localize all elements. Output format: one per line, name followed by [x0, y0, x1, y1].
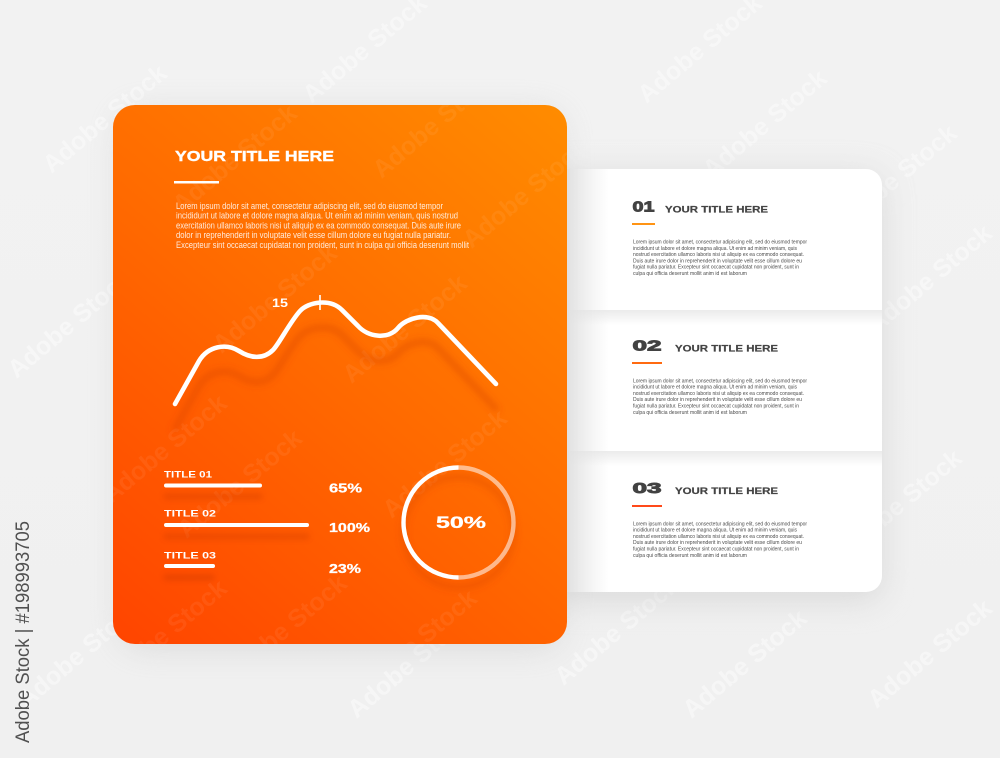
watermark on orange card: Adobe Stock: [367, 64, 502, 184]
watermark on orange card: Adobe Stock: [167, 99, 302, 219]
section 02 title: YOUR TITLE HERE: [675, 344, 778, 354]
watermark pattern on background: Adobe Stock: [549, 571, 684, 691]
section 03 body text: nostrud exercitation ullamco laboris nisi ut aliquip ex ea commodo consequat.: [633, 534, 804, 540]
heading underline: [174, 181, 219, 184]
section 02: [632, 338, 807, 416]
watermark pattern on background: Adobe Stock: [827, 119, 962, 239]
watermark pattern on background: Adobe Stock: [832, 444, 967, 564]
watermark on orange card: Adobe Stock: [377, 404, 512, 524]
donut value: 50%: [436, 514, 486, 532]
bar: title 02: [164, 508, 371, 539]
watermark on orange card: Adobe Stock: [207, 239, 342, 359]
section 01 body text: culpa qui officia deserunt mollit anim id est laborum: [633, 271, 748, 277]
watermark on orange card: Adobe Stock: [97, 574, 232, 694]
watermark on orange card: Adobe Stock: [217, 569, 352, 689]
chart value label: 15: [272, 296, 288, 310]
section 01 title: YOUR TITLE HERE: [665, 204, 768, 214]
section 02 body text: Duis aute irure dolor in reprehenderit in voluptate velit esse cillum dolore eu: [633, 397, 802, 403]
bar: title 03: 23%: [329, 561, 362, 576]
section 01 body text: nostrud exercitation ullamco laboris nisi ut aliquip ex ea commodo consequat.: [633, 252, 804, 258]
watermark on orange card: Adobe Stock: [347, 584, 482, 704]
section 03 title: YOUR TITLE HERE: [675, 486, 778, 496]
watermark on orange card: Adobe Stock: [457, 134, 592, 254]
watermark pattern on background: Adobe Stock: [862, 219, 997, 339]
section 02 number: 02: [632, 338, 662, 354]
section 01 body text: fugiat nulla pariatur. Excepteur sint occaecat cupidatat non proident, sunt in: [633, 265, 799, 271]
intro text: [176, 201, 469, 250]
section 03: [632, 480, 807, 559]
intro text: Lorem ipsum dolor sit amet, consectetur adipiscing elit, sed do eiusmod tempor: [176, 201, 443, 211]
watermark on orange card: Adobe Stock: [97, 389, 232, 509]
watermark on orange card: [113, 105, 567, 644]
intro text: exercitation ullamco laboris nisi ut aliquip ex ea commodo consequat. Duis aute irure: [176, 220, 461, 230]
bar: title 01: [164, 470, 363, 499]
section 01 body text: [633, 240, 807, 277]
section 02 body text: Lorem ipsum dolor sit amet, consectetur adipiscing elit, sed do eiusmod tempor: [633, 378, 807, 384]
intro text: Excepteur sint occaecat cupidatat non proident, sunt in culpa qui officia deserunt mollit: [176, 240, 469, 250]
section 01 body text: incididunt ut labore et dolore magna aliqua. Ut enim ad minim veniam, quis: [633, 246, 797, 252]
bar: title 01: TITLE 01: [164, 470, 213, 480]
watermark pattern on background: Adobe Stock: [37, 59, 172, 179]
section 03 body text: Duis aute irure dolor in reprehenderit in voluptate velit esse cillum dolore eu: [633, 540, 802, 546]
section 02 body text: nostrud exercitation ullamco laboris nisi ut aliquip ex ea commodo consequat.: [633, 391, 804, 397]
donut gauge: [404, 468, 514, 587]
section 01 accent line: [632, 223, 655, 225]
intro text: dolor in reprehenderit in voluptate velit esse cillum dolore eu fugiat nulla pariatur.: [176, 230, 451, 240]
panel: white sections card: [540, 169, 882, 600]
section 01: [632, 198, 807, 277]
watermark pattern on background: Adobe Stock: [677, 604, 812, 724]
watermark pattern on background: Adobe Stock: [697, 64, 832, 184]
section 03 accent line: [632, 505, 662, 507]
section 01 body text: Lorem ipsum dolor sit amet, consectetur adipiscing elit, sed do eiusmod tempor: [633, 240, 807, 246]
section 03 body text: incididunt ut labore et dolore magna aliqua. Ut enim ad minim veniam, quis: [633, 528, 797, 534]
intro text: incididunt ut labore et dolore magna aliqua. Ut enim ad minim veniam, quis nostrud: [176, 211, 458, 221]
section 03 body text: culpa qui officia deserunt mollit anim id est laborum: [633, 553, 748, 559]
watermark on orange card: Adobe Stock: [337, 269, 472, 389]
section 03 body text: fugiat nulla pariatur. Excepteur sint occaecat cupidatat non proident, sunt in: [633, 546, 799, 552]
section 01 number: 01: [632, 198, 654, 216]
section 03 body text: [633, 521, 807, 559]
section 03 body text: Lorem ipsum dolor sit amet, consectetur adipiscing elit, sed do eiusmod tempor: [633, 521, 807, 527]
bar: title 01: 65%: [329, 480, 363, 496]
section 02 body text: incididunt ut labore et dolore magna aliqua. Ut enim ad minim veniam, quis: [633, 385, 797, 391]
watermark on orange card: Adobe Stock: [172, 424, 307, 544]
watermark pattern on background: Adobe Stock: [2, 264, 137, 384]
line chart: [175, 295, 496, 429]
section 02 body text: [633, 378, 807, 416]
bar: title 02: TITLE 02: [164, 508, 216, 520]
section 02 body text: fugiat nulla pariatur. Excepteur sint occaecat cupidatat non proident, sunt in: [633, 404, 799, 410]
stock id vertical text: Adobe Stock | #198993705: [13, 521, 34, 743]
watermark pattern on background: Adobe Stock: [862, 594, 997, 714]
watermark pattern on background: Adobe Stock: [12, 594, 147, 714]
bar: title 03: TITLE 03: [164, 550, 216, 562]
section 02 accent line: [632, 362, 662, 364]
chart peak tick: [319, 295, 321, 310]
watermark pattern on background: Adobe Stock: [342, 604, 477, 724]
bar: title 02: 100%: [329, 520, 371, 535]
section 02 body text: culpa qui officia deserunt mollit anim id est laborum: [633, 410, 748, 416]
panel: orange main card: [113, 105, 567, 654]
main heading: YOUR TITLE HERE: [175, 148, 334, 165]
section 01 body text: Duis aute irure dolor in reprehenderit in voluptate velit esse cillum dolore eu: [633, 258, 802, 264]
bar: title 03: [164, 550, 362, 580]
section 03 number: 03: [632, 480, 662, 497]
